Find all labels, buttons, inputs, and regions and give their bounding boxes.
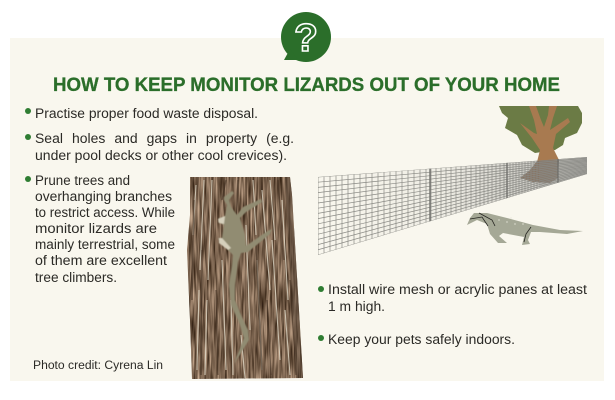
lizard on trunk [218,191,272,364]
photo: monitor lizard on tree trunk [185,175,305,381]
icon: question speech bubble: ? [294,17,318,60]
bullet: wire mesh: 1 m high. [328,299,385,314]
bullet: prune trees: of them are excellent [35,253,167,268]
bullet: seal holes: Seal holes and gaps in property (e.g. [35,131,294,146]
bullet: wire mesh: Install wire mesh or acrylic panes at least [328,282,587,297]
bullet: prune trees: monitor lizards are [35,221,157,236]
bullet: pets indoors: Keep your pets safely indoors. [328,332,515,347]
photo credit: Photo credit: Cyrena Lin [33,360,163,372]
bullet: prune trees: mainly terrestrial, some [35,237,175,252]
illustration: monitor lizard [467,213,583,245]
title: HOW TO KEEP MONITOR LIZARDS OUT OF YOUR HOME [53,75,560,96]
bullet: prune trees [25,173,175,285]
bullet: prune trees: to restrict access. While [35,205,175,220]
bullet: prune trees: tree climbers. [35,270,117,285]
bullet: wire mesh [318,282,587,314]
bullet: seal holes [25,131,294,163]
bullet: prune trees: overhanging branches [35,189,172,204]
bullet: food waste: Practise proper food waste disposal. [35,106,258,121]
bullet: prune trees: Prune trees and [35,173,130,188]
icon: question speech bubble [281,12,331,62]
illustration: wire mesh fence [318,157,587,255]
illustration: tree behind fence [499,106,582,183]
bullet: seal holes: under pool decks or other cool crevices). [35,148,287,163]
